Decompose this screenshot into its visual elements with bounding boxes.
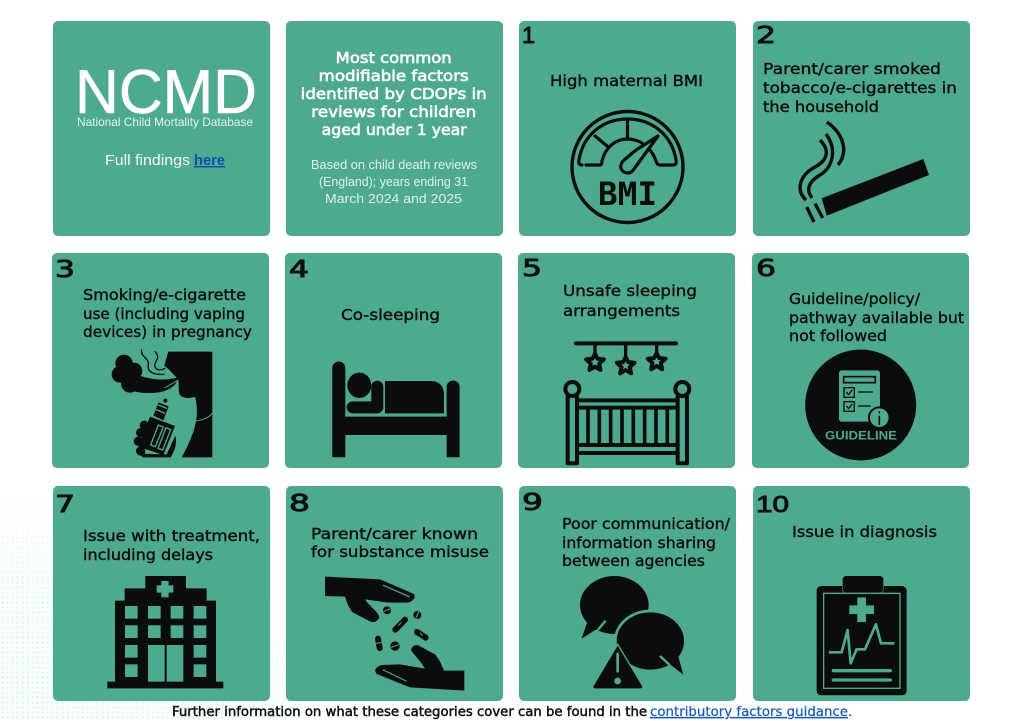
title source note: March 2024 and 2025	[325, 191, 462, 206]
title heading: modifiable factors	[319, 67, 469, 85]
title heading: identified by CDOPs in	[301, 85, 487, 103]
panel: 4 co-sleeping	[285, 253, 502, 468]
panel: 8 substance misuse	[286, 486, 503, 701]
title source note: Based on child death reviews	[311, 157, 477, 172]
number 3: 3	[55, 257, 75, 283]
label: Poor communication/	[562, 515, 731, 533]
panel: 1 high maternal BMI	[519, 21, 736, 236]
link: here: here	[194, 152, 225, 169]
panel: 9 poor communication	[519, 486, 736, 701]
panel: 7 issue with treatment	[53, 486, 270, 701]
number 8: 8	[289, 491, 310, 517]
number 7: 7	[55, 492, 75, 518]
label: devices) in pregnancy	[83, 323, 252, 341]
footer note: .	[848, 705, 852, 720]
full findings text: Full findings	[105, 152, 190, 169]
label: pathway available but	[789, 309, 964, 327]
label: use (including vaping	[83, 305, 245, 323]
icon: guideline: GUIDELINE	[825, 428, 897, 442]
footer note: contributory factors guidance	[650, 705, 848, 720]
label	[563, 282, 697, 320]
logo wordmark: NCMD	[75, 58, 257, 127]
label: for substance misuse	[311, 543, 489, 561]
number 2: 2	[756, 23, 776, 49]
label	[311, 525, 489, 561]
label	[789, 290, 964, 345]
title source note	[311, 157, 477, 206]
title source note: (England); years ending 31	[319, 174, 468, 189]
title heading: aged under 1 year	[322, 121, 468, 139]
icon: bed	[332, 361, 460, 457]
label: Parent/carer smoked	[763, 60, 941, 78]
panel: NCMD logo	[53, 21, 270, 236]
footer note	[172, 705, 852, 720]
label: Co-sleeping	[341, 306, 440, 324]
icon: medical clipboard	[817, 576, 907, 695]
panel: title	[286, 21, 503, 236]
logo subtitle: National Child Mortality Database	[77, 115, 253, 129]
label: Unsafe sleeping	[563, 282, 697, 300]
label: Issue with treatment,	[83, 527, 260, 545]
label: including delays	[83, 546, 213, 564]
label: Issue in diagnosis	[792, 523, 937, 541]
number 10: 10	[756, 491, 789, 517]
title heading: reviews for children	[311, 103, 476, 121]
icon: cigarette	[800, 122, 929, 222]
icon: hospital	[107, 576, 223, 688]
number 5: 5	[522, 256, 542, 282]
label: not followed	[789, 327, 887, 345]
icon: hands and pills	[325, 577, 464, 691]
label	[763, 60, 957, 116]
label: Parent/carer known	[311, 525, 478, 543]
panel: 6 guideline not followed	[752, 253, 969, 468]
label	[562, 515, 731, 570]
icon: crib with mobile	[565, 343, 689, 463]
label: information sharing	[562, 534, 716, 552]
panel: 3 smoking in pregnancy	[52, 253, 269, 468]
label: Smoking/e-cigarette	[83, 286, 246, 304]
icon: person vaping	[112, 350, 212, 457]
footer note: Further information on what these categories cover can be found in the	[172, 705, 647, 720]
panel: 2 parent/carer smoked	[753, 21, 970, 236]
label: between agencies	[562, 552, 705, 570]
number 9: 9	[522, 490, 543, 516]
icon: BMI gauge: BMI	[598, 175, 657, 213]
label: tobacco/e-cigarettes in	[763, 79, 957, 97]
number 6: 6	[756, 256, 776, 282]
icon: BMI gauge	[572, 112, 683, 222]
label: Guideline/policy/	[789, 290, 921, 308]
label: arrangements	[563, 302, 680, 320]
label: High maternal BMI	[550, 72, 703, 90]
number 1: 1	[522, 22, 535, 48]
label	[83, 286, 252, 341]
label	[83, 527, 260, 564]
icon: guideline	[805, 350, 916, 460]
number 4: 4	[289, 257, 309, 283]
panel: 10 issue in diagnosis	[753, 486, 970, 701]
title heading: Most common	[336, 49, 452, 67]
icon: speech bubbles and warning	[580, 576, 685, 688]
label: the household	[763, 98, 879, 116]
panel: 5 unsafe sleeping	[518, 253, 735, 468]
title heading	[301, 49, 487, 139]
